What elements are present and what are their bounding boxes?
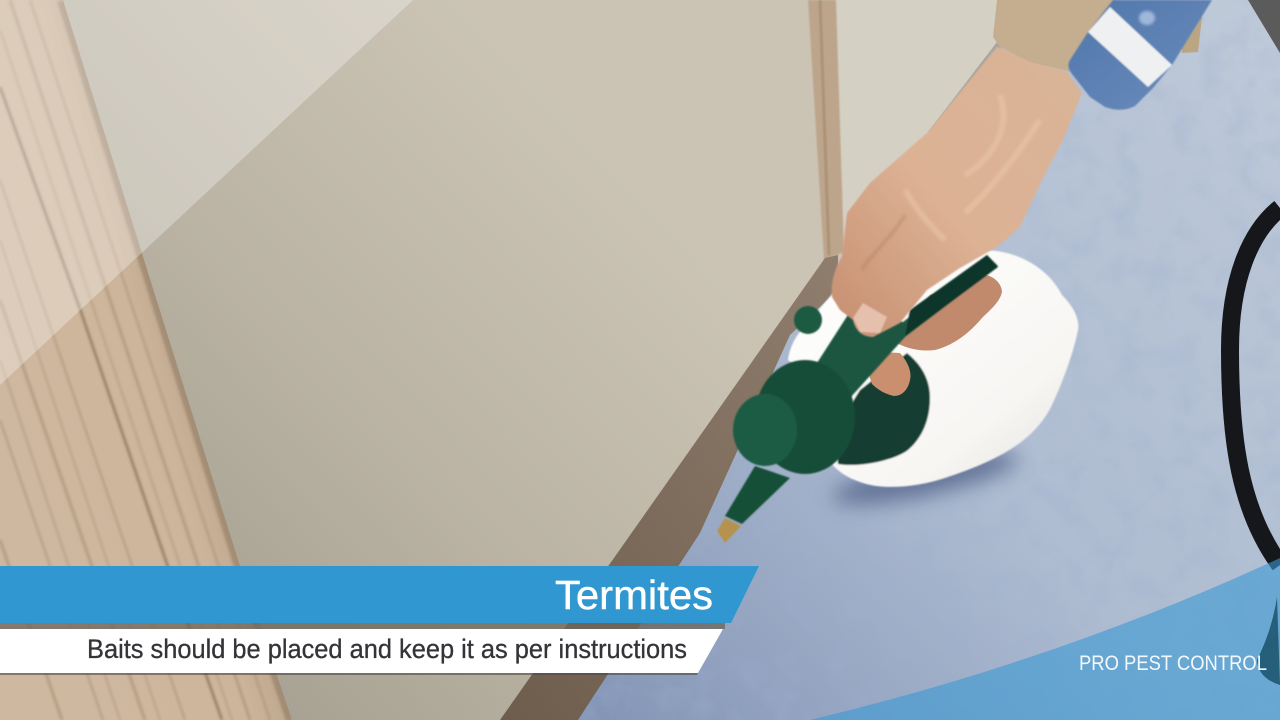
wooden post xyxy=(808,0,844,260)
small valve knob xyxy=(794,306,822,334)
bottle shadow xyxy=(828,441,1022,515)
wooden door frame xyxy=(0,0,292,720)
dark corner xyxy=(1248,0,1280,53)
dark object at right edge xyxy=(1257,597,1280,685)
nozzle xyxy=(725,466,790,524)
banner shadow xyxy=(0,623,725,629)
spray bottle xyxy=(788,250,1078,487)
fingers under handle xyxy=(895,275,1002,351)
bottle collar xyxy=(835,353,930,465)
title banner xyxy=(0,566,759,623)
cap knob xyxy=(733,394,797,466)
brass tip xyxy=(717,518,741,543)
wall skirting edge xyxy=(928,42,1002,140)
blue handle object xyxy=(1068,0,1212,110)
cap disc xyxy=(755,360,855,474)
title: Termites xyxy=(555,572,713,618)
sprayer handle xyxy=(817,255,998,398)
lower finger xyxy=(868,352,911,396)
subtitle: Baits should be placed and keep it as per instructions xyxy=(87,634,687,664)
subtitle banner xyxy=(0,629,723,673)
floor xyxy=(570,0,1280,720)
sleeve xyxy=(993,0,1202,72)
black hose xyxy=(1230,208,1280,565)
bottle body xyxy=(788,250,1078,487)
thumbnail xyxy=(853,303,887,333)
blue corner arc xyxy=(810,558,1280,720)
hand xyxy=(832,47,1082,337)
right wall section xyxy=(835,0,1000,252)
sprayer head xyxy=(717,306,855,543)
diagonal light overlay xyxy=(0,0,413,385)
baseboard xyxy=(500,255,838,720)
